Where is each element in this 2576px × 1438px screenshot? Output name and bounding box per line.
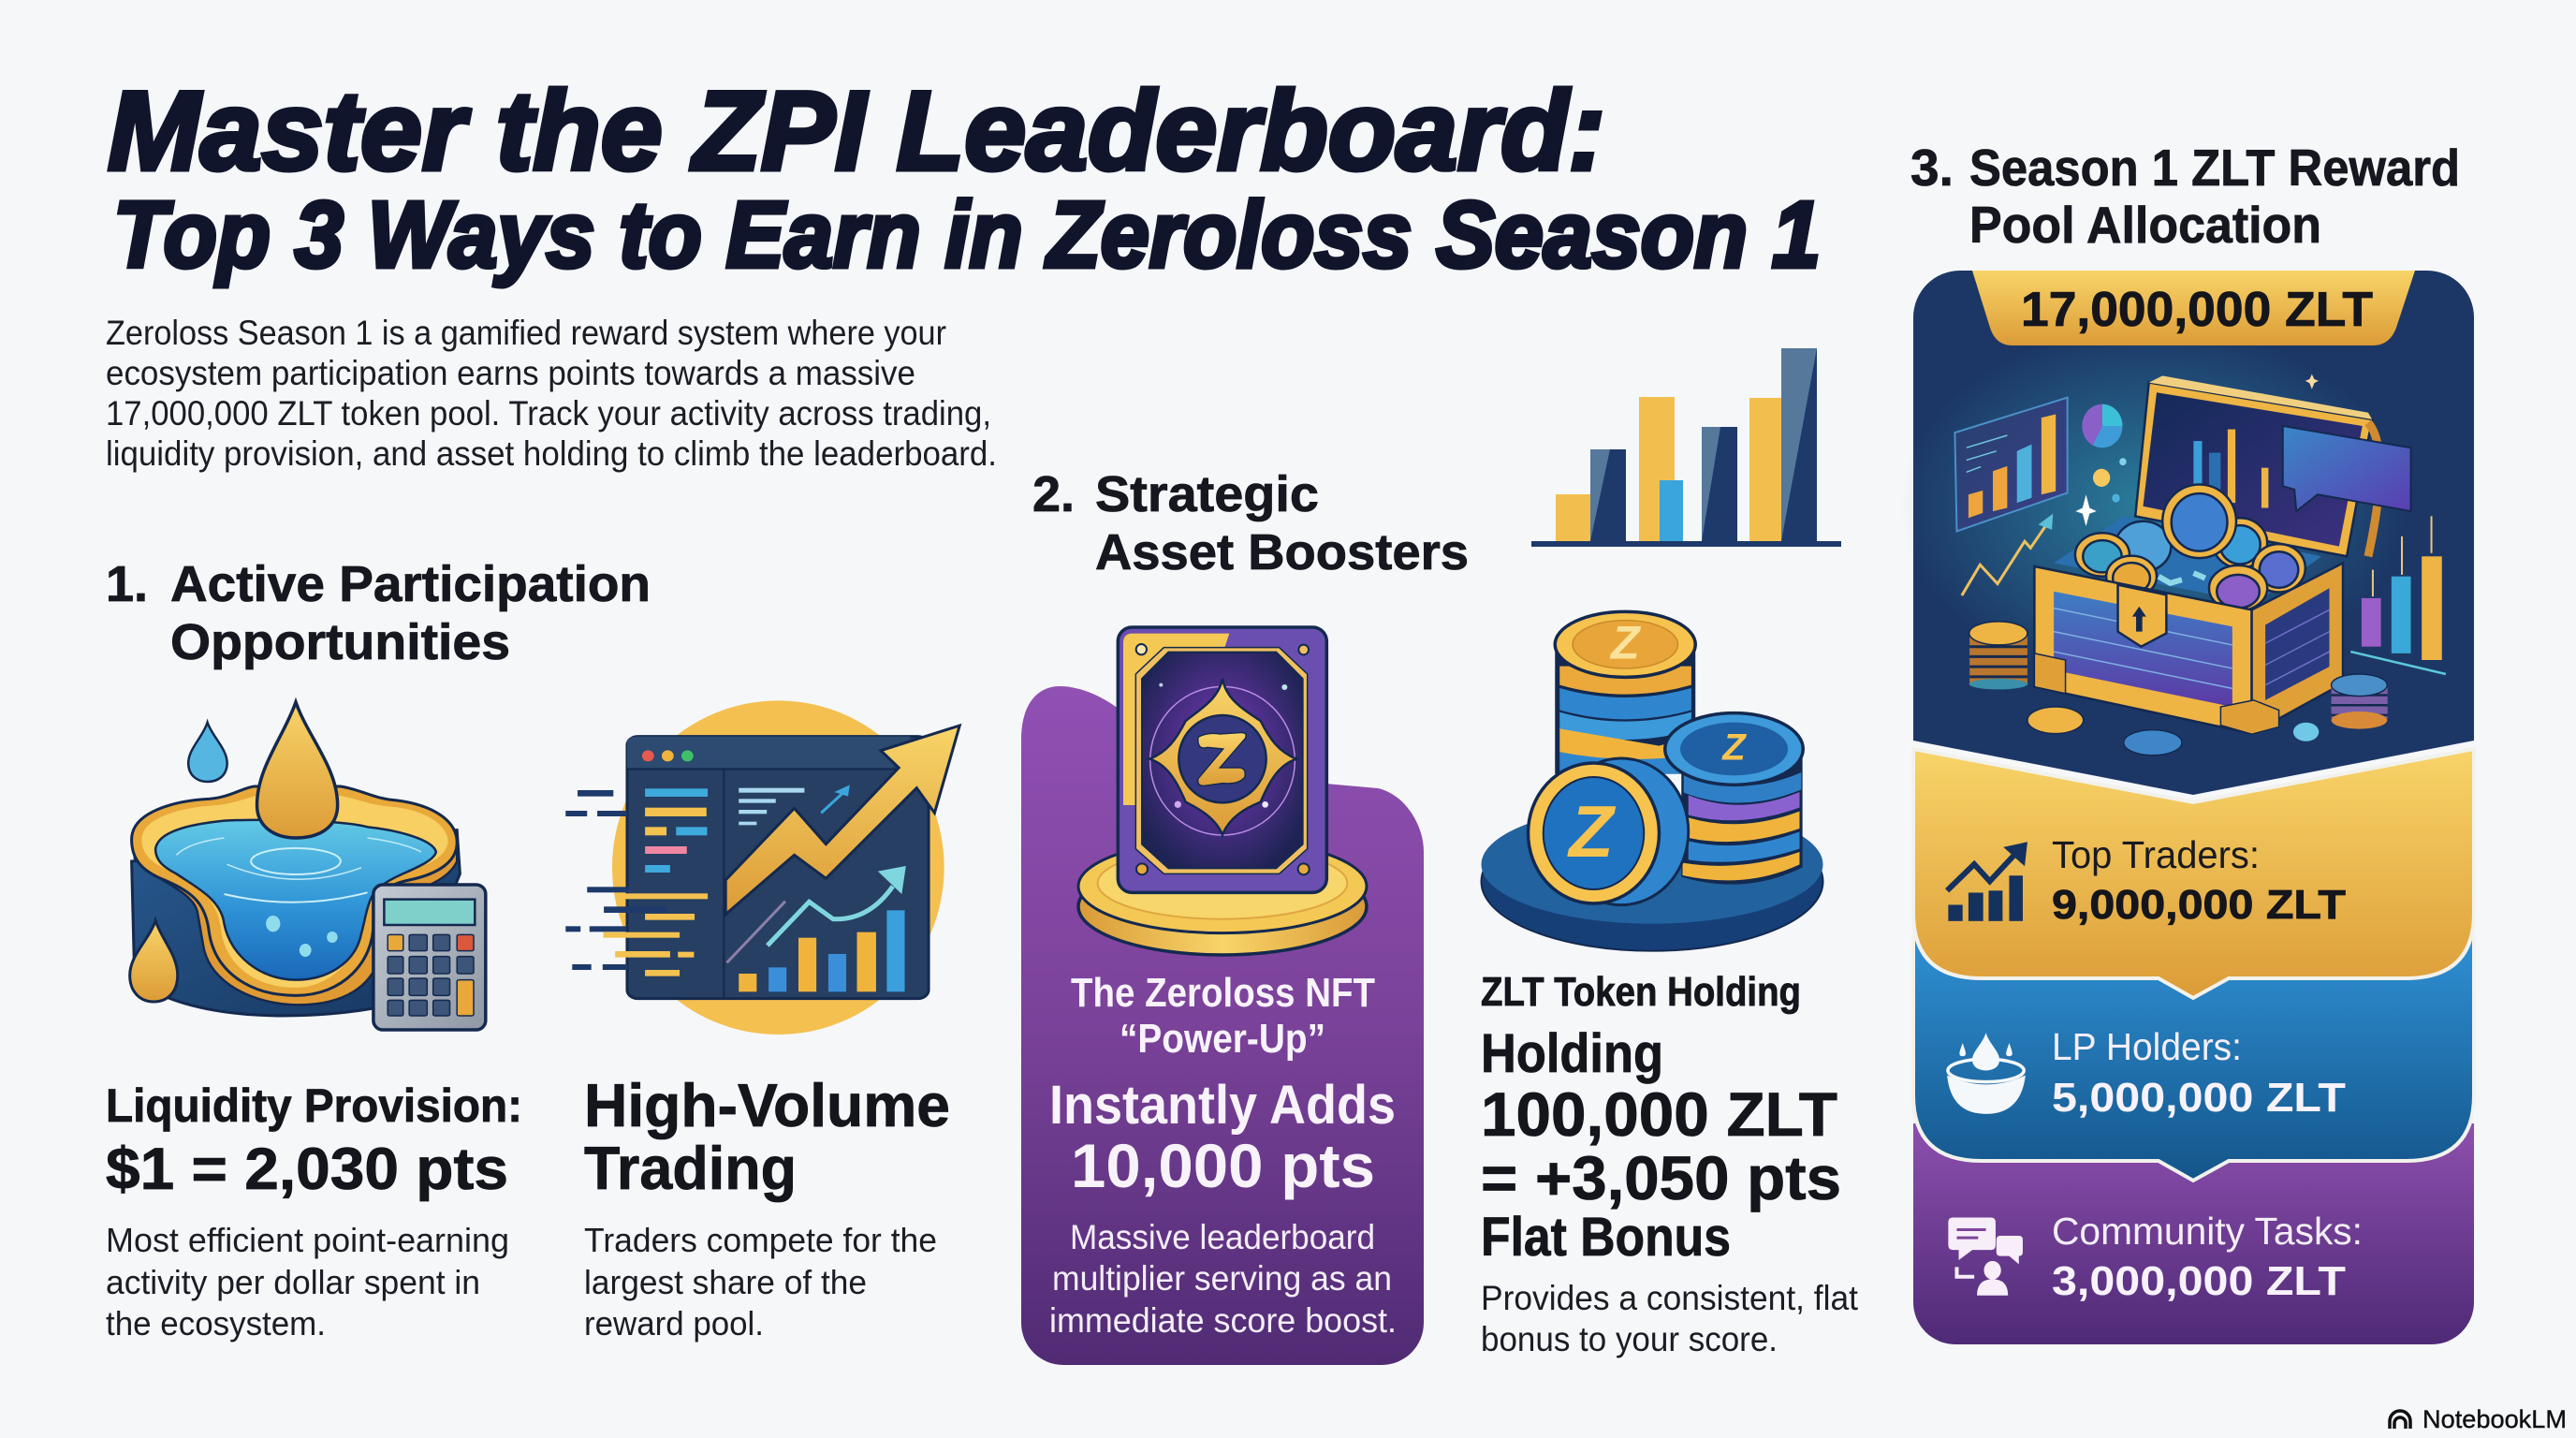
heading: 2. Strategic Asset Boosters: Strategic [1095, 466, 1319, 522]
text: ZLT token holding: bonus to your score. [1481, 1320, 1778, 1358]
text: high-volume trading: largest share of the [584, 1263, 867, 1301]
text: NFT power-up: immediate score boost. [1049, 1301, 1397, 1340]
heading: 2. Strategic Asset Boosters: 2. [1032, 466, 1075, 522]
intro text block: ecosystem participation earns points towards a massive [106, 354, 915, 392]
NotebookLM logo: NotebookLM [2422, 1405, 2567, 1433]
text: liquidity provision: Liquidity Provision: [106, 1079, 522, 1132]
icon: treasure chest with coins and charts [1954, 374, 2446, 756]
segment: top traders [1913, 749, 2474, 998]
panel: zeroloss NFT power-up [1021, 627, 1424, 1365]
heading: 1. Active Participation Opportunities: 1. [106, 556, 148, 612]
text: NFT power-up: “Power-Up” [1120, 1016, 1325, 1062]
text: high-volume trading: reward pool. [584, 1304, 764, 1343]
text: liquidity provision: $1 = 2,030 pts [106, 1137, 508, 1202]
segment: community tasks: Community Tasks: [2052, 1210, 2363, 1253]
heading: 3. Season 1 ZLT Reward Pool Allocation: Season 1 ZLT Reward [1969, 139, 2460, 197]
heading: 2. Strategic Asset Boosters [1032, 466, 1469, 580]
segment: community tasks [1913, 1123, 2474, 1344]
text: NFT power-up [1049, 970, 1397, 1340]
text: liquidity provision: the ecosystem. [106, 1304, 326, 1343]
card background [1021, 686, 1424, 1365]
icon: ZLT coin stacks: Z [1609, 616, 1642, 668]
text: high-volume trading: Traders compete for the [584, 1221, 937, 1259]
heading: 3. Season 1 ZLT Reward Pool Allocation [1910, 139, 2460, 254]
text: ZLT token holding: ZLT Token Holding [1481, 969, 1801, 1015]
text: NFT power-up: Massive leaderboard [1070, 1218, 1375, 1256]
intro text block [106, 314, 997, 473]
heading: 3. Season 1 ZLT Reward Pool Allocation: Pool Allocation [1969, 196, 2321, 254]
text: liquidity provision: Most efficient point-earning [106, 1221, 509, 1259]
icon: trading dashboard with rising arrow [565, 700, 959, 1034]
heading: 1. Active Participation Opportunities: Active Participation [170, 556, 651, 612]
icon: ZLT coin stacks: Z [1721, 727, 1747, 769]
segment: community tasks: 3,000,000 ZLT [2052, 1258, 2346, 1304]
text: liquidity provision [106, 1079, 522, 1343]
segment: LP holders [1913, 936, 2474, 1181]
title: Master the ZPI Leaderboard: [108, 68, 1605, 194]
text: liquidity provision: activity per dollar spent in [106, 1263, 480, 1301]
icon: NFT card on pedestal [1078, 627, 1367, 955]
icon: LP bowl [1947, 1033, 2026, 1114]
text: ZLT token holding: Holding [1481, 1023, 1663, 1084]
intro text block: liquidity provision, and asset holding to climb the leaderboard. [106, 434, 997, 473]
heading: 1. Active Participation Opportunities: Opportunities [170, 614, 510, 670]
heading: 1. Active Participation Opportunities [106, 556, 651, 670]
banner: total pool: 17,000,000 ZLT [2021, 283, 2373, 337]
icon: liquidity pool with calculator [130, 702, 486, 1030]
segment: LP holders: 5,000,000 ZLT [2052, 1075, 2346, 1121]
text: ZLT token holding [1481, 969, 1859, 1358]
icon: ZLT coin stacks [1481, 611, 1823, 951]
text: ZLT token holding: Provides a consistent, flat [1481, 1279, 1859, 1317]
icon: community chat [1948, 1217, 2023, 1296]
intro text block: Zeroloss Season 1 is a gamified reward system where your [106, 314, 946, 352]
segment: top traders: 9,000,000 ZLT [2052, 882, 2346, 928]
text: NFT power-up: Instantly Adds [1049, 1075, 1396, 1136]
text: high-volume trading: High-Volume [584, 1071, 950, 1139]
text: ZLT token holding: Flat Bonus [1481, 1207, 1731, 1268]
text: ZLT token holding: = +3,050 pts [1481, 1143, 1841, 1212]
segment: treasure chest header [1900, 271, 2474, 795]
heading: 2. Strategic Asset Boosters: Asset Boosters [1095, 524, 1469, 580]
segment: top traders: Top Traders: [2052, 833, 2260, 876]
intro text block: 17,000,000 ZLT token pool. Track your activity across trading, [106, 394, 991, 433]
text: NFT power-up: multiplier serving as an [1052, 1259, 1392, 1298]
text: high-volume trading [584, 1071, 950, 1343]
icon: chart with arrow [1947, 842, 2027, 921]
text: NFT power-up: The Zeroloss NFT [1071, 970, 1375, 1016]
title [108, 68, 1821, 287]
segment: LP holders: LP Holders: [2052, 1025, 2242, 1068]
text: ZLT token holding: 100,000 ZLT [1481, 1079, 1837, 1149]
text: NFT power-up: 10,000 pts [1071, 1131, 1375, 1200]
bar chart icon [1531, 348, 1841, 547]
banner: total pool [1972, 271, 2415, 345]
speech bubble [2283, 426, 2411, 511]
panel: reward pool allocation [1900, 271, 2474, 1344]
text: high-volume trading: Trading [584, 1134, 797, 1202]
heading: 3. Season 1 ZLT Reward Pool Allocation: 3. [1910, 139, 1954, 197]
icon: ZLT coin stacks: Z [1567, 790, 1617, 873]
title: Top 3 Ways to Earn in Zeroloss Season 1 [113, 183, 1821, 287]
